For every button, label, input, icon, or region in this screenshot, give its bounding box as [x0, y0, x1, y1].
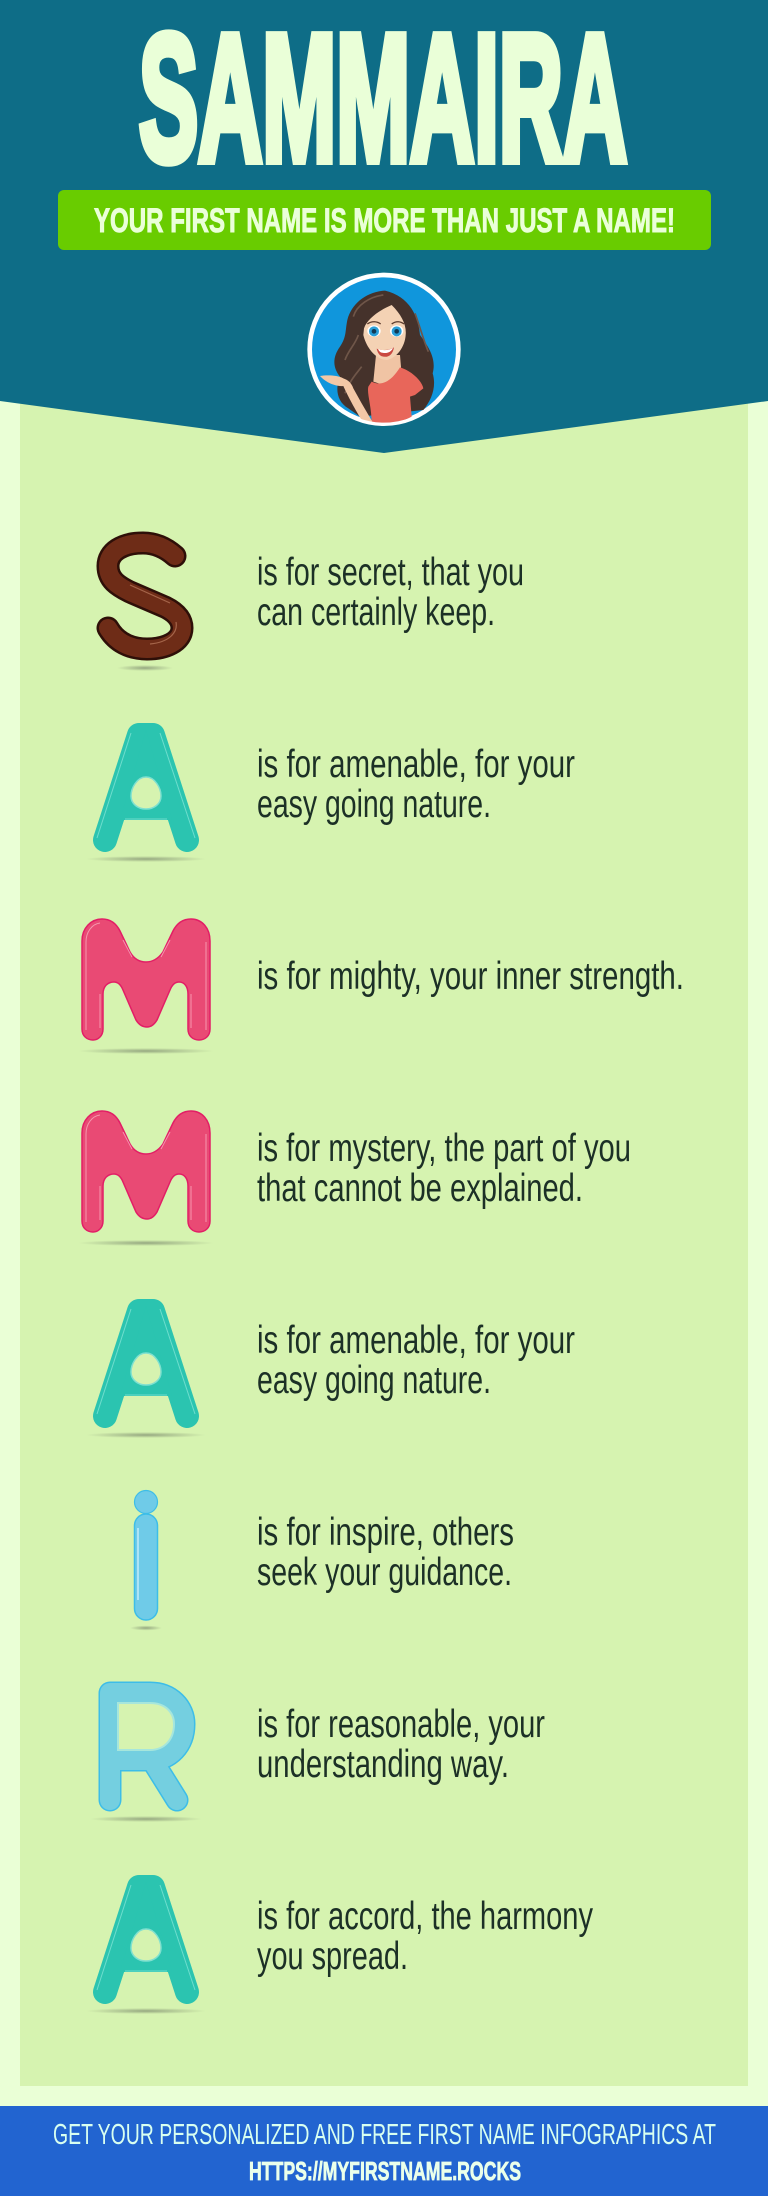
row 6: i [130, 1490, 514, 1630]
text: A: is for accord, the harmony [257, 1895, 593, 1938]
letter A [86, 1306, 206, 1438]
letter S [108, 543, 182, 671]
text: A: is for amenable, for your [257, 1319, 575, 1362]
letter M [78, 1111, 214, 1246]
footer background [0, 2106, 768, 2196]
letter A [86, 730, 206, 862]
letter i [130, 1490, 162, 1630]
text: A: easy going nature. [257, 1359, 491, 1402]
row 8: A [86, 1882, 593, 2014]
text: i: seek your guidance. [257, 1551, 512, 1594]
letter R [90, 1693, 202, 1822]
row 5: A [86, 1306, 575, 1438]
text: A: you spread. [257, 1935, 408, 1978]
main content panel [20, 380, 748, 2086]
row 7: R [90, 1693, 545, 1822]
text: i: is for inspire, others [257, 1511, 514, 1554]
letter A [86, 1882, 206, 2014]
letter M [78, 919, 214, 1054]
footer [0, 2106, 768, 2196]
banner background [58, 190, 711, 250]
row 1: S [108, 543, 524, 671]
text: R: understanding way. [257, 1743, 509, 1786]
footer url: HTTPS://MYFIRSTNAME.ROCKS [249, 2156, 521, 2186]
avatar: cartoon woman in circle [310, 275, 458, 424]
text: R: is for reasonable, your [257, 1703, 545, 1746]
text: M: that cannot be explained. [257, 1167, 583, 1210]
tagline banner [58, 190, 711, 250]
text: A: is for amenable, for your [257, 743, 575, 786]
text: M: is for mystery, the part of you [257, 1127, 631, 1170]
row 2: A [86, 730, 575, 862]
row 3: M [78, 919, 684, 1054]
header banner with chevron [0, 0, 768, 453]
text: A: easy going nature. [257, 783, 491, 826]
text: S: can certainly keep. [257, 591, 495, 634]
text: S: is for secret, that you [257, 551, 524, 594]
row 4: M [78, 1111, 631, 1246]
